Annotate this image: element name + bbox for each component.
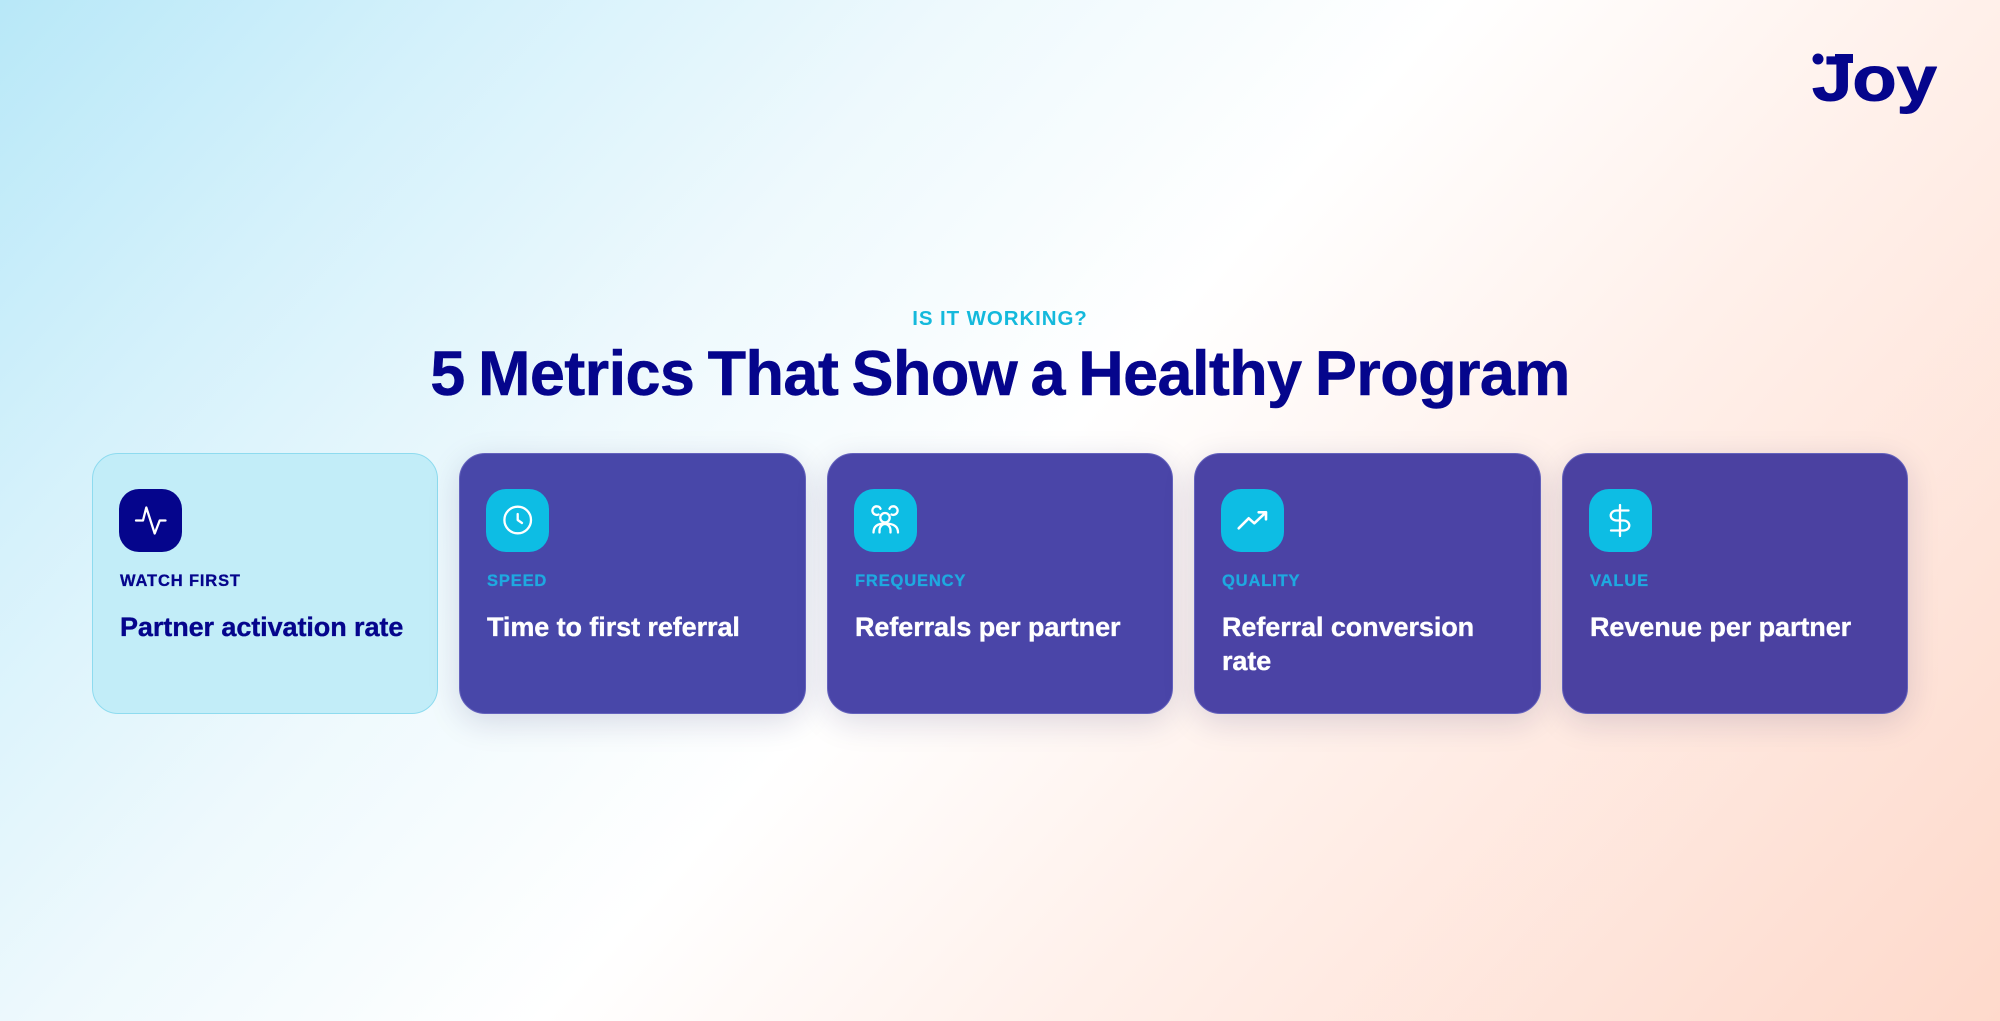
logo: Joy: Joy	[1812, 44, 1937, 114]
icon: dollar	[1589, 489, 1652, 552]
icon: trending up	[1221, 489, 1284, 552]
panel: watch first	[92, 453, 438, 714]
metric: time to first referral: Time to first referral	[487, 612, 740, 642]
metric: referrals per partner: Referrals per partner	[855, 612, 1120, 642]
icon: clock	[486, 489, 549, 552]
eyebrow: is it working: IS IT WORKING?	[912, 307, 1088, 330]
label: quality: QUALITY	[1222, 572, 1300, 590]
panel: speed	[459, 453, 806, 714]
panel: frequency	[827, 453, 1173, 714]
metric: referral conversion rate: Referral conversion rate	[1222, 612, 1474, 676]
panel: quality	[1194, 453, 1541, 714]
metric: revenue per partner: Revenue per partner	[1590, 612, 1851, 642]
panel: value	[1562, 453, 1908, 714]
title: 5 Metrics That Show a Healthy Program	[430, 339, 1570, 409]
metric: partner activation rate: Partner activation rate	[120, 612, 403, 642]
label: speed: SPEED	[487, 572, 547, 590]
label: value: VALUE	[1590, 572, 1649, 590]
label: frequency: FREQUENCY	[855, 572, 966, 590]
icon: people	[854, 489, 917, 552]
label: watch first: WATCH FIRST	[120, 572, 241, 590]
icon: activity pulse	[119, 489, 182, 552]
